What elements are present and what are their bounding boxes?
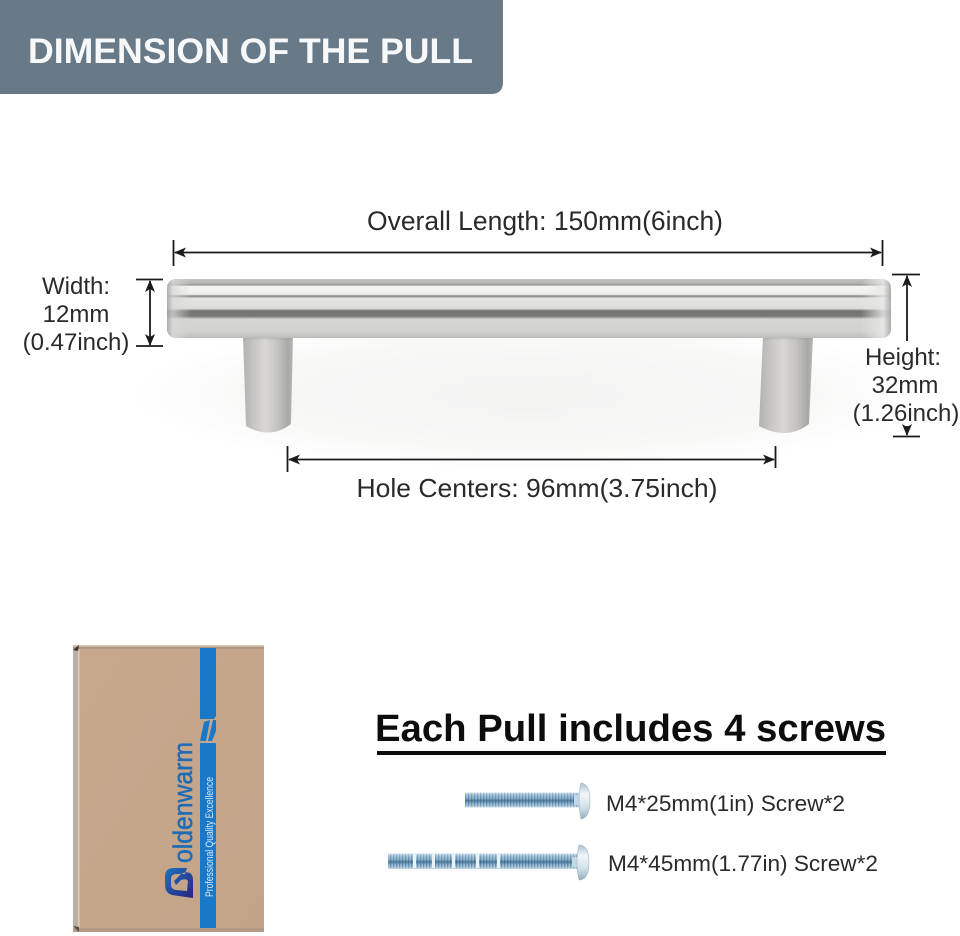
right leg: [759, 336, 813, 433]
screw: 45mm: [388, 845, 589, 880]
dimension: width: 12mm: [43, 301, 109, 328]
header banner: [0, 0, 503, 94]
dimension: hole centers: Hole Centers: 96mm(3.75inch): [356, 473, 718, 503]
box tagline: Professional Quality Excellence: [204, 777, 216, 897]
dimension: height: 32mm: [872, 372, 938, 399]
box brand logo: [165, 742, 198, 898]
box brand logo: oldenwarm: [168, 742, 198, 863]
horizontal bar: [167, 279, 891, 338]
screw: 25mm: [465, 783, 590, 819]
dimension: width: (0.47inch): [23, 329, 129, 356]
dimension: width: Width:: [42, 273, 110, 300]
pull handle: [167, 279, 891, 433]
left leg: [243, 336, 293, 433]
product box: [73, 645, 264, 932]
dimension: width: [23, 273, 163, 356]
heading: dimension of the pull: DIMENSION OF THE PULL: [28, 31, 473, 71]
dimension: height: Height:: [865, 344, 941, 371]
blue stripe: [200, 648, 216, 928]
dimension: height: (1.26inch): [853, 400, 959, 427]
dimension: height: [853, 274, 959, 436]
soft shadow under handle: [130, 320, 930, 470]
label: 25mm screw: M4*25mm(1in) Screw*2: [606, 791, 845, 816]
dimension: overall length: Overall Length: 150mm(6inch): [367, 206, 723, 236]
label: 45mm screw: M4*45mm(1.77in) Screw*2: [608, 851, 878, 876]
screws heading: Each Pull includes 4 screws: [375, 707, 886, 750]
